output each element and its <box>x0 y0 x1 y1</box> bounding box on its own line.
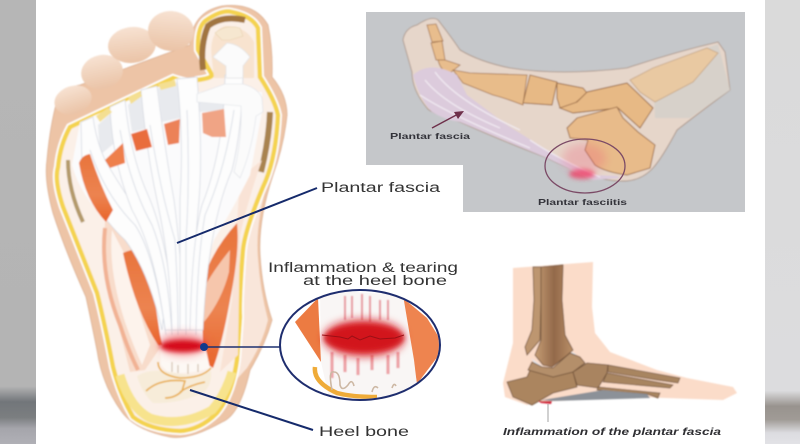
pale outer skin on the right side <box>236 180 268 380</box>
side view redness <box>569 169 595 179</box>
inflammation on the fascia <box>160 340 206 352</box>
label: plantar fascia: Plantar fascia <box>321 180 441 195</box>
side view heel bone <box>567 107 655 175</box>
label: inflammation and tearing: at the heel bone <box>303 273 447 288</box>
side view fascia <box>413 68 620 180</box>
skin outline of foot <box>46 5 287 437</box>
cartilage <box>531 352 576 372</box>
magnified fringes <box>330 372 396 392</box>
label: inflammation and tearing: Inflammation & tearing <box>268 260 458 275</box>
magnified orange bone line <box>315 367 377 397</box>
big toe interior <box>211 26 254 78</box>
toe bone tip <box>215 27 243 40</box>
side view shin fade <box>653 44 730 118</box>
midfoot bones <box>573 363 608 388</box>
muscle: left upper <box>79 154 113 222</box>
label: inflammation and tearing <box>268 260 458 288</box>
label: heel bone: Heel bone <box>319 424 409 439</box>
illustration: ankle skeleton side view <box>503 262 737 405</box>
red inflammation mark <box>538 401 552 404</box>
arch soft tissue <box>103 221 162 372</box>
inflammation glow <box>159 333 207 355</box>
side view metatarsal <box>453 70 527 105</box>
label: inflammation of the plantar fascia: Inflammation of the plantar fascia <box>503 426 721 438</box>
muscle: right lower <box>201 223 238 368</box>
heel bone orange outlines <box>146 362 211 398</box>
brown fatty tissue at ball of foot <box>261 112 270 172</box>
magnified left muscle <box>295 298 321 362</box>
magnified inflammation core <box>324 326 404 350</box>
talus <box>528 353 585 377</box>
toes <box>51 9 196 119</box>
leader line with dot: inflammation <box>200 343 281 351</box>
heel fascia end with fringes <box>160 345 210 373</box>
fringe details <box>172 362 198 374</box>
leader line: plantar fascia <box>177 188 317 243</box>
fibre lines along the fascia <box>90 110 234 335</box>
fascia band <box>542 390 650 401</box>
long arch band <box>104 228 138 370</box>
lattice shading between bands <box>98 82 225 155</box>
tear line <box>322 335 404 340</box>
right grey side bar <box>765 0 800 444</box>
leader line: heel bone <box>190 390 313 430</box>
inflamed area ring <box>545 139 625 193</box>
muscle: left lower <box>123 250 163 347</box>
toe pad yellow dots <box>96 80 176 122</box>
label: plantar fasciitis: Plantar fasciitis <box>538 197 627 207</box>
cross band under the big toe <box>197 84 263 178</box>
big toe tendon knot <box>213 43 250 78</box>
right soft tissue <box>220 160 262 372</box>
magnified lower streaks <box>332 352 398 378</box>
white line around the fat band <box>57 11 278 431</box>
calcaneus <box>507 370 577 405</box>
ankle skin <box>503 262 737 405</box>
callout: magnified heel tear <box>280 290 445 402</box>
plantar fascia trunk <box>72 78 262 348</box>
muscle gaps between the bands <box>105 109 226 168</box>
illustration: plantar view of the foot <box>46 5 287 437</box>
fibula <box>525 267 541 355</box>
magnified upper streaks <box>345 294 388 322</box>
heel bone <box>137 371 211 403</box>
metatarsal bones <box>597 365 680 398</box>
side view midfoot bones <box>523 48 718 128</box>
side view skin <box>403 18 730 181</box>
tibia <box>535 265 573 367</box>
side view red glow <box>562 143 606 173</box>
brown fatty tissue at big toe <box>202 18 245 70</box>
magnified right muscle <box>404 300 439 382</box>
side view toe bones <box>427 24 460 73</box>
left grey side bar <box>0 0 36 444</box>
magnified red inflammation <box>324 320 404 356</box>
pale yellow heel pad <box>120 372 232 422</box>
magnified fascia <box>320 290 417 402</box>
brown fatty tissue at lateral edge <box>68 160 83 222</box>
pointer from inflammation <box>547 404 549 422</box>
panel: side view of plantar fascia <box>366 12 745 212</box>
label: plantar fascia: Plantar fascia <box>390 131 470 141</box>
inner pale arch <box>111 230 150 365</box>
plantar fascia bands <box>81 75 243 330</box>
side view fascia strands <box>420 72 600 177</box>
arrow to fascia <box>432 111 464 128</box>
yellow fat band <box>57 11 278 431</box>
muscle highlight <box>203 250 230 322</box>
